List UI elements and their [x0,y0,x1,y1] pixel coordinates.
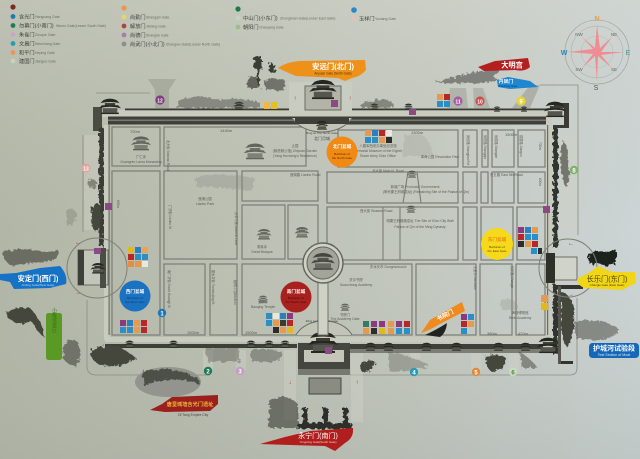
service icon clusters [94,94,550,354]
place labels: Baoqing Temple [251,305,275,309]
west wall [93,107,110,340]
legend column 2 [121,5,220,48]
north gate: ↑ [294,96,296,102]
place labels: 宝庆寺 [258,299,269,304]
legend column 2: Shangqin Gate [146,16,169,20]
legend column 4: 玉祥门 [359,14,375,22]
place labels: 尚德路 Shangde [494,135,499,158]
legend column 3 [235,6,335,31]
place labels: (明代秦王府城遗址) (Remaining Site of the Palace of Qin) [383,189,469,194]
bell tower [303,243,343,335]
bastion: west: 西门瓮城 [126,288,145,295]
compass rose: W [561,50,568,57]
place labels: 700m [538,142,542,150]
legend column 3: 中山门(小东门) [243,14,278,22]
place labels: 革命公园 Revolution Park [421,154,460,159]
place labels: 南广济街 South Guangji St [167,270,172,308]
east gate: → [568,292,574,298]
banner: east gate: 长乐门(东门) [587,274,627,284]
place labels: 甜水井街 Tianshuijing St [211,270,216,305]
place labels: (Yang Hucheng's Residence) [273,154,317,158]
place labels: The Academy Gate [330,317,360,321]
bastion: east: 东门瓮城 [488,236,507,243]
banner: north gate: Anyuan Gate (North Gate) [314,72,352,76]
south gate: ↑ [356,380,358,386]
bastion: east [481,228,513,260]
legend column 3: 朝阳门 [243,23,259,31]
icons south centre right [388,321,410,334]
place labels: 600m [116,200,120,208]
place labels: Lianhu Park [196,202,214,206]
place labels: 700m [130,129,141,134]
legend column 1: Wumu Gate(Lesser South Gate) [56,24,106,28]
compass rose: NE [611,32,617,37]
place labels: 东木头市 Dongmutoushi [370,264,407,269]
place labels: Guanzhong Academy [340,283,373,287]
banner: Tang imperial city [150,395,218,417]
place labels: 明秦王府城墙遗址 The Site of Xi'an City Wall [386,218,454,223]
moat light strips [84,79,577,422]
place labels: 书院门 [340,312,351,317]
banner: Daming palace: 大明宫 [501,60,523,70]
place labels: 北大街 Main N. Road [372,168,404,173]
bastion: west: the West Gate [125,300,145,304]
banner: north gate [278,60,366,81]
place labels: 西华门 [297,227,308,232]
legend column 2: Shangde Gate [146,34,169,38]
compass rose: SW [575,67,583,72]
place labels: 大差市 Dachashi [473,266,478,290]
compass rose: S [594,85,599,92]
numbered gate markers: 2 [206,370,210,376]
place labels: Guangren Lama Monastery [120,160,162,164]
numbered gate markers: 4 [412,370,416,376]
banner: Danfeng gate: 丹凤门 [499,78,513,85]
icons south west [266,313,293,333]
icons near book street [461,314,474,334]
illustration: lamp and figures north of the wall [247,56,286,90]
numbered gate markers: 9 [519,100,523,106]
place labels: 关中书院 [349,277,363,282]
icons south centre [363,321,385,334]
place labels: 建国路 Jianguo [519,135,524,157]
place labels: 1500m [187,330,200,335]
legend column 2: 解放门 [130,22,146,30]
place labels: Palace of Qin of the Ming Dynasty [394,225,446,229]
numbered gate markers: 1 [160,312,164,318]
landmark sketches [131,134,520,311]
banner: Tang imperial city: 唐皇城墙含光门遗址 [167,400,214,408]
south gate: Ring at The South Gate [306,319,339,323]
legend column 1: 文昌门 [19,40,35,48]
banner: Daming palace [478,58,530,71]
compass rose [561,16,631,92]
west gate: → [75,290,81,296]
bastion: east: Barbican of [489,245,505,249]
north wall [100,108,548,124]
ink landscape along the moat [2,67,620,372]
legend column 2: 尚勤门 [130,13,146,21]
legend column 4: Yuxiang Gate [375,17,396,21]
place labels: 新城广场 Provincial Government [391,184,439,189]
north gate: 北门月城 [314,135,330,141]
banner: Tang imperial city: Of Tang Empire City [178,413,208,417]
banner: Danfeng gate: Danfeng Gate [499,84,518,88]
numbered gate markers: 5 [474,370,478,376]
legend column 2: 尚德门 [130,31,146,39]
east gate: ← [568,241,574,247]
banner: moat test section [589,343,639,358]
south gate [288,319,358,394]
numbered gate markers: 11 [455,100,461,106]
icons north west strip [264,102,277,109]
banner: Academy street [421,302,465,337]
icons east gate [518,227,542,254]
place labels: Great Mosque [251,250,273,254]
banner: west gate: Anding Gate(West Gate) [22,283,54,287]
north gate: ↑ [348,96,352,102]
place labels: (杨虎城公馆) Zhiyuan Garden [273,148,317,153]
place labels: 八路军西安办事处纪念馆 [359,143,397,148]
bastion: north [326,136,358,168]
legend column 1: Jianguo Gate [35,60,56,64]
icons north wall strip [437,94,450,107]
legend column 3: Chaoyang Gate [259,26,284,30]
banner: Danfeng gate [497,77,538,89]
numbered gate markers: 6 [511,370,515,376]
numbered gate markers: 12 [157,98,163,104]
place labels [116,128,542,336]
corner towers [99,99,566,353]
place labels: 广济街 Lianhu St [168,205,173,229]
banner: Academy street: 书院门 [435,308,455,323]
legend column 4 [351,7,396,22]
place labels: 莲湖公园 [198,196,212,201]
legend column 1: Heping Gate [35,51,55,55]
city blocks and street grid [112,127,545,335]
place labels: 1500m [505,132,518,137]
south gate: ↓ [288,380,292,386]
compass rose: SE [611,67,617,72]
numbered gate markers: 3 [238,370,242,376]
place labels: 西大街 Shaanxi Road [360,208,393,213]
battlement towers [124,102,531,351]
place labels: 大学习巷 Daxuexi Lane [234,212,239,245]
numbered gate markers: 8 [572,168,576,174]
compass rose: E [626,50,631,57]
icons below west bastion [120,320,147,333]
banner: green vertical sign [46,307,62,360]
legend column 1 [10,4,106,65]
south wall [105,337,548,353]
place labels: 600m [538,178,542,186]
banner: moat test section: 护城河试验段 [593,344,635,352]
restroom markers [94,100,550,354]
illustration: stone stele at Hanguang gate [135,367,201,397]
numbered gate markers: 10 [477,100,483,106]
numbered gate markers [82,95,578,377]
west gate: ← [75,240,81,246]
moat outline [83,85,578,375]
legend column 2: Jiefang Gate [146,24,166,28]
banner: east gate [577,266,636,290]
banner: south gate: 永宁门(南门) [298,431,338,440]
illustration: soldiers at south gate [268,397,352,429]
place labels: 东五路 East 5th Road [490,172,523,177]
place labels: 广仁寺 [136,154,147,159]
place labels: 止园 [292,143,299,148]
bastion: north: Barbican of [334,152,350,156]
numbered gate markers: 13 [83,166,89,172]
east gate [539,239,597,298]
icons west gate [128,247,148,267]
banner: west gate: 安定门(西门) [18,274,59,283]
place labels: 长乐路 Changle [510,266,515,289]
legend column 1: 和平门 [19,48,35,56]
west gate [67,238,127,298]
north gate: Ring at The North Gate [306,131,338,135]
place labels: Route Army Xi'an Office [360,154,396,158]
bastion: west: Barbican of [127,296,143,300]
banner: west gate [0,266,66,289]
bastion: south: Barbican of [288,296,304,300]
place labels: 1300m [411,130,424,135]
compass rose: N [594,16,600,23]
bastion: east: the East Gate [488,249,507,253]
place labels: 380m [487,331,498,336]
place labels: 尚勤路 Shangqin [483,135,488,159]
illustration: horse riders at east gate [588,250,617,266]
place labels: 420m [518,331,529,336]
legend column 1: Hanguang Gate [35,15,60,19]
legend column 1: 含光门 [19,12,35,20]
city wall [93,99,583,364]
place labels: 清真寺 [257,244,268,249]
legend column 2: Shangwu Gate(Lesser North Gate) [166,42,220,46]
banner: green vertical sign: 小雁塔景区 [51,307,57,333]
compass rose: NW [575,32,583,37]
place labels: 莲湖路 Lianhu Road [290,172,320,177]
legend column 1: Zhuque Gate [35,33,55,37]
place labels: Memorial Museum of the Eighth [354,149,402,153]
banner: north gate: 安远门(北门) [312,62,354,71]
place labels: 桥梓口 Qiaozikou [233,280,238,305]
banner: south gate: Yongning Gate(South Gate) [300,440,336,444]
place labels: 1440m [220,128,233,133]
icons south east wall [541,295,548,310]
north gate [289,80,352,141]
place labels: 尚俭路 Shangjian Rd [466,135,471,165]
bastion: north: 北门瓮城 [333,143,352,150]
east wall [546,103,583,364]
place labels: 北大街 Shaanxi Road [166,140,171,171]
bastion: west [120,280,150,312]
legend [10,4,396,65]
legend column 1: 朱雀门 [19,30,35,38]
bastion: south: the South Gate [286,300,307,304]
legend column 1: 建国门 [19,57,35,65]
legend column 1: 勿幕门(小南门) [19,22,54,30]
legend column 3: Zhongshan Gate(Lesser East Gate) [280,16,335,20]
legend column 1: Wenchang Gate [35,42,60,46]
place labels: 1500m [245,330,258,335]
banner: moat test section: Test Section of Moat [598,353,630,357]
bastion: south: 南门瓮城 [287,288,306,295]
place labels: 碑林博物馆 [512,310,529,315]
icons north east of gate [365,130,392,143]
bastion: south [280,282,312,312]
banner: east gate: Changle Gate (East Gate) [590,283,624,287]
banner: south gate [260,428,353,451]
place labels: Stele Academy [509,316,532,320]
bastion: north: the North Gate [332,156,352,160]
legend column 2: 尚武门(小北门) [130,40,165,48]
